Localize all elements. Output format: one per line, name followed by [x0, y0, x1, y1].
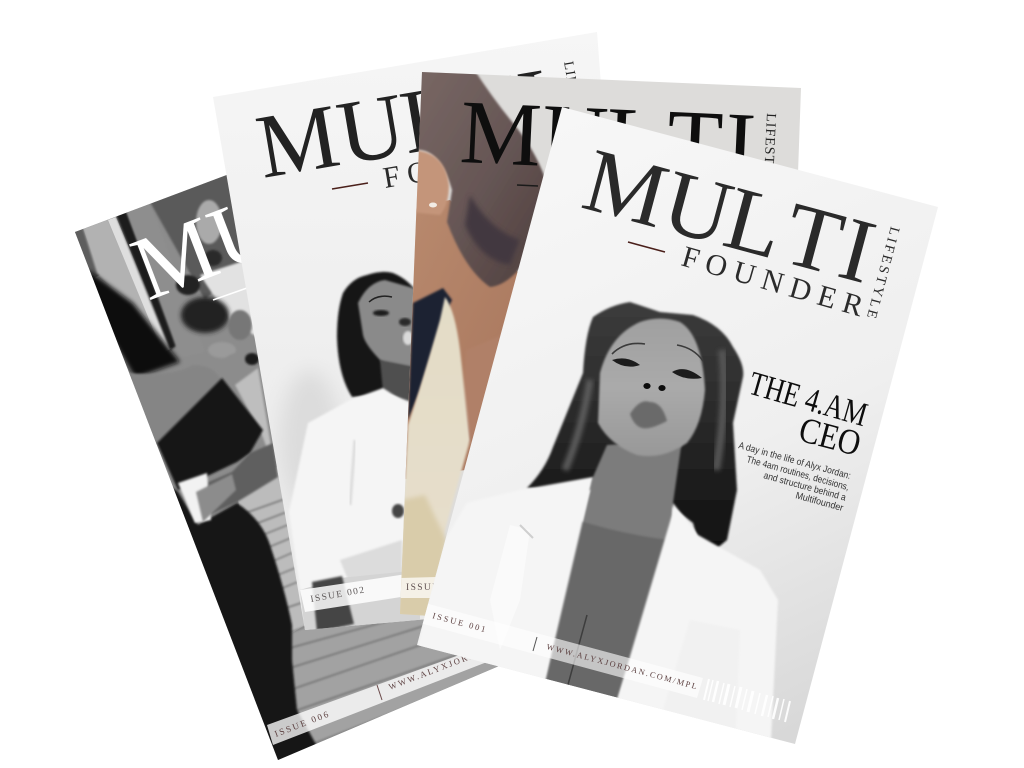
cover: issue 001 (front)	[417, 107, 938, 744]
headline	[751, 372, 869, 454]
deck copy: A day in the life of Alyx Jordan:	[737, 440, 852, 482]
neck and chest	[545, 440, 682, 700]
subtitle word: FOUNDER	[678, 240, 867, 323]
side word: LIFESTYLE	[863, 225, 902, 320]
headline: THE 4.AM	[745, 365, 871, 434]
deck copy: The 4am routines, decisions,	[745, 454, 850, 493]
footer band	[400, 577, 436, 598]
title word: MULTI	[574, 129, 885, 303]
deck copy: Multifounder	[794, 490, 845, 514]
issue label: ISSUE 001	[431, 610, 489, 635]
masthead	[462, 102, 776, 187]
photo: woman in white blazer	[400, 302, 778, 760]
masthead: MULTI	[249, 49, 558, 198]
masthead: LIFESTYLE	[759, 113, 778, 196]
issue label: ISSUE 006	[273, 708, 332, 739]
website: WWW.ALYXJORDAN.COM/MPL	[387, 623, 547, 692]
rule	[213, 288, 247, 300]
barcode	[704, 679, 790, 722]
deck copy	[737, 440, 852, 514]
background	[213, 32, 600, 630]
masthead: FOUNDER	[381, 131, 571, 195]
footer band	[420, 603, 703, 698]
photo: woman in black dress	[88, 270, 318, 768]
photo: woman in profile, cream blazer	[398, 60, 545, 616]
hair	[527, 302, 743, 560]
issue label: ISSUE 002	[310, 585, 366, 605]
footer band	[267, 656, 485, 745]
cover: issue 003	[390, 60, 810, 620]
masthead: MULTI	[458, 81, 758, 195]
headline: CEO	[795, 409, 865, 464]
cover: issue 006 (back)	[75, 175, 498, 760]
cover: issue 002	[213, 32, 600, 630]
fan of four magazine covers	[75, 32, 938, 760]
footer band	[300, 574, 402, 612]
photo: woman in white shirt	[289, 272, 420, 632]
blazer	[418, 476, 778, 738]
masthead	[582, 150, 900, 318]
website: WWW.ALYXJORDAN.COM/MPL	[545, 642, 699, 692]
masthead: white MULTI: MULTI	[119, 120, 431, 320]
masthead: LIFESTYLE	[560, 60, 589, 144]
face	[598, 318, 705, 456]
deck copy: and structure behind a	[762, 470, 848, 504]
background	[417, 107, 938, 744]
issue label: ISSUE 003	[406, 583, 462, 593]
photo: veranda, palms and deck	[75, 175, 498, 760]
accent rule	[628, 242, 665, 252]
background	[404, 74, 801, 538]
